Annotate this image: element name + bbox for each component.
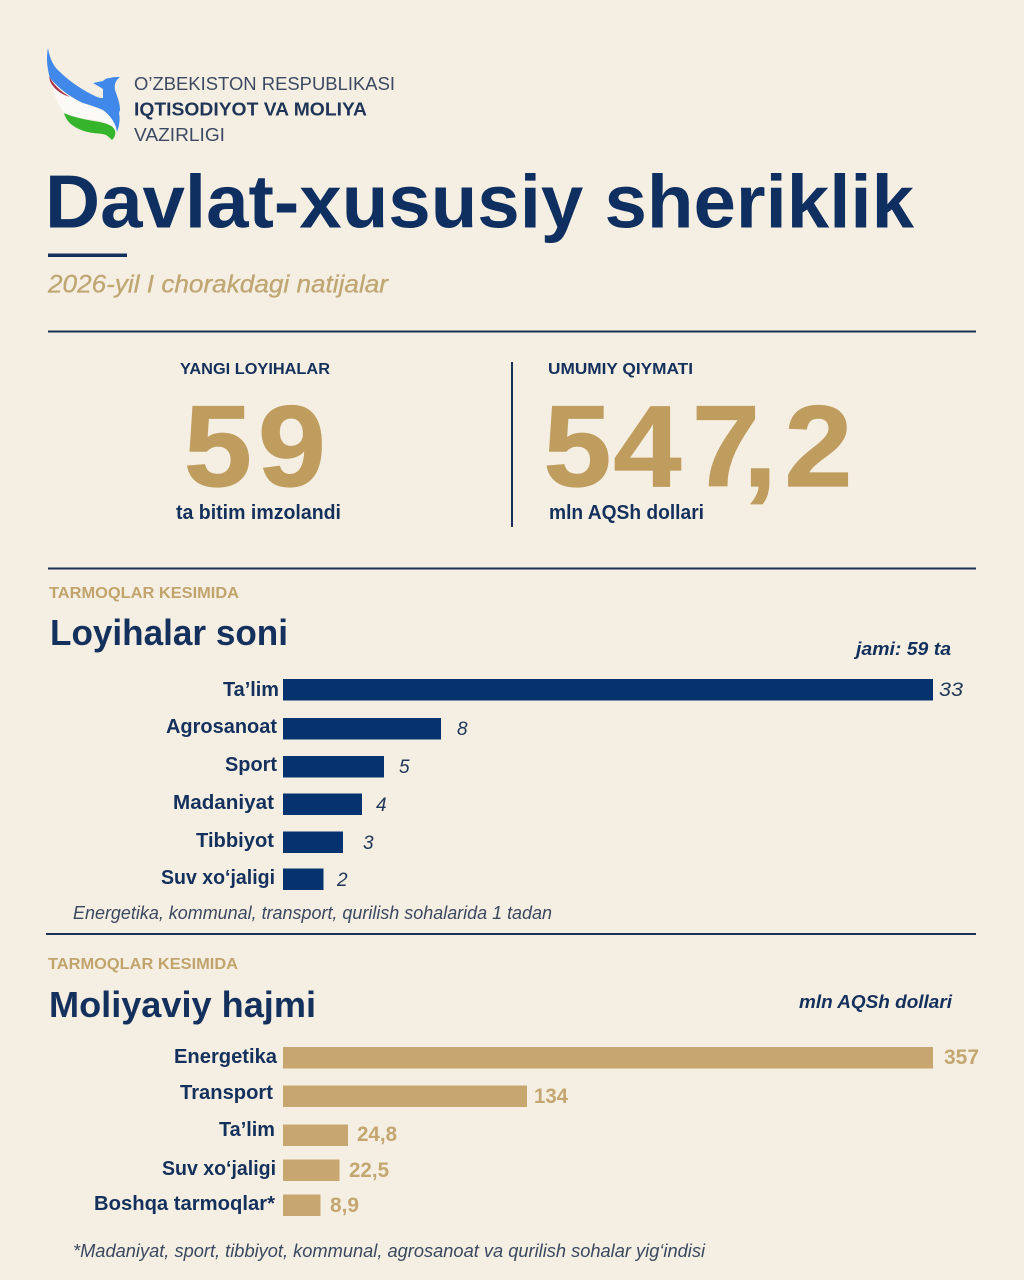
section eyebrow: TARMOQLAR KESIMIDA (48, 956, 238, 973)
heading: financial volume: Moliyaviy hajmi (49, 984, 316, 1025)
ministry name: VAZIRLIGI (134, 125, 225, 145)
bar chart: project count: 3 (363, 833, 374, 854)
logo (47, 48, 395, 145)
bar chart: project count: 2 (336, 870, 348, 891)
bar chart: project count: Suv xo‘jaligi (161, 867, 275, 889)
stat: new projects: ta bitim imzolandi (176, 502, 341, 524)
stat: new projects (176, 361, 341, 524)
panel: number of projects (49, 585, 963, 923)
bar chart: project count (161, 679, 963, 891)
panel: financial volume (48, 956, 979, 1261)
bar chart: financial volume: 357 (944, 1046, 979, 1069)
bar chart: financial volume: 134 (534, 1085, 568, 1108)
subtitle: 2026-yil I chorakdagi natijalar (47, 270, 390, 298)
bar chart: project count: 4 (376, 795, 387, 816)
stat: total value: UMUMIY QIYMATI (548, 361, 693, 378)
bar chart: financial volume: 8,9 (330, 1194, 359, 1217)
total note: jami: 59 ta (854, 639, 951, 659)
footnote: other sectors: Energetika, kommunal, transport, qurilish sohalarida 1 tadan (73, 903, 552, 923)
title: Davlat-xususiy sheriklik (45, 160, 914, 244)
title underline (48, 254, 127, 257)
bar chart: financial volume: Boshqa tarmoqlar* (94, 1193, 275, 1215)
footnote: other sectors composition: *Madaniyat, sport, tibbiyot, kommunal, agrosanoat va qurilish sohalar yig‘indisi (73, 1241, 706, 1261)
ministry name: O’ZBEKISTON RESPUBLIKASI (134, 74, 395, 94)
bar chart: project count: 33 (939, 680, 963, 701)
bar chart: financial volume: 24,8 (357, 1123, 397, 1146)
bar chart: project count: Sport (225, 754, 277, 776)
bar chart: project count: Agrosanoat (166, 716, 277, 738)
bar chart: financial volume: 22,5 (349, 1159, 389, 1182)
ministry name (134, 74, 395, 145)
heading: project count: Loyihalar soni (50, 612, 288, 653)
bar chart: financial volume: Suv xo‘jaligi (162, 1158, 276, 1180)
panel: key figures (176, 361, 852, 527)
bar chart: project count: Tibbiyot (196, 830, 274, 852)
bar chart: financial volume: Ta’lim (219, 1119, 275, 1141)
bar chart: project count: Madaniyat (173, 792, 274, 814)
stat: total value: mln AQSh dollari (549, 502, 704, 524)
bar chart: project count: 5 (399, 757, 410, 778)
stat: new projects: 59 (184, 383, 326, 511)
icon: ministry emblem (47, 48, 120, 140)
section eyebrow: TARMOQLAR KESIMIDA (49, 585, 239, 602)
bar chart: financial volume: Transport (180, 1082, 273, 1104)
stat: total value: 547,2 (543, 383, 852, 511)
bar chart: financial volume (94, 1046, 979, 1217)
ministry name: IQTISODIYOT VA MOLIYA (134, 100, 367, 120)
bar chart: financial volume: Energetika (174, 1046, 278, 1068)
bar chart: project count: 8 (457, 719, 468, 740)
bar chart: project count: Ta’lim (223, 679, 279, 701)
unit note: mln AQSh dollari (799, 992, 953, 1012)
stat: new projects: YANGI LOYIHALAR (180, 361, 330, 378)
